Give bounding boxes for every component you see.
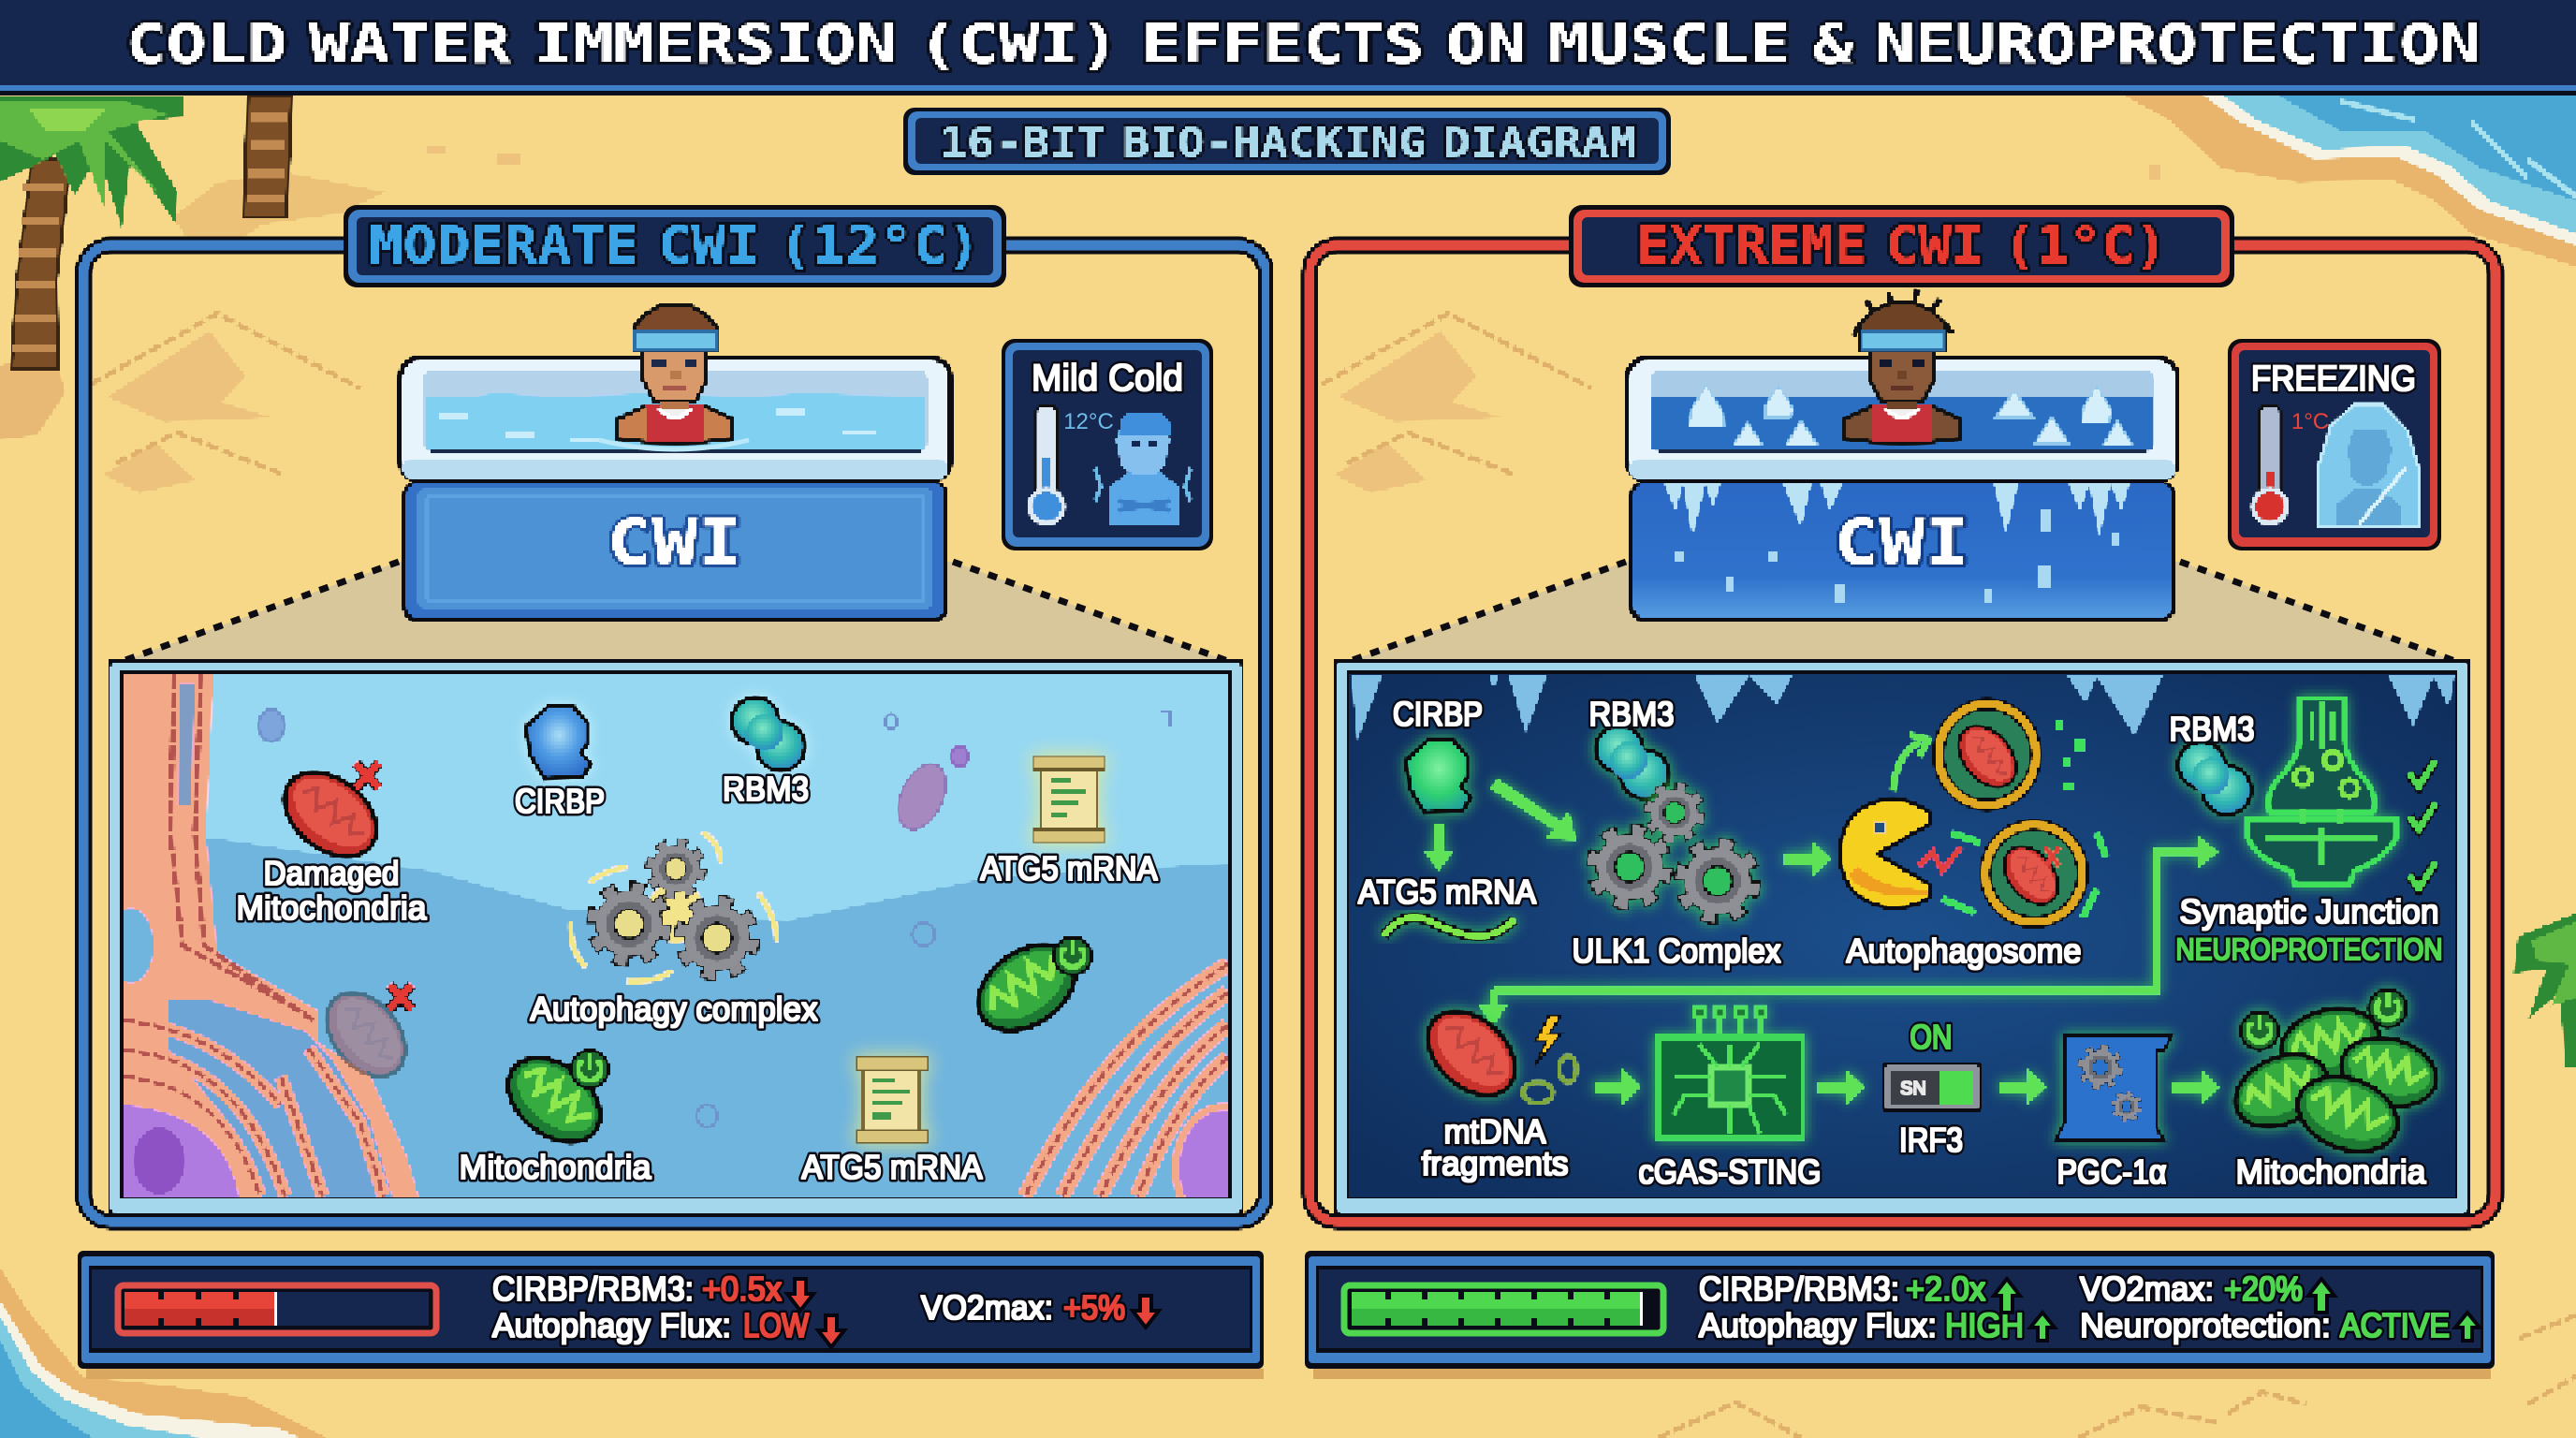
stats text extreme: +20% xyxy=(2224,1269,2303,1308)
labels: extreme inset: ATG5 mRNA xyxy=(1358,873,1536,911)
cytoplasm xyxy=(124,675,1228,1196)
panel: extreme CWI xyxy=(1310,205,2496,1222)
progress bar high xyxy=(1344,1285,1663,1333)
icon: autophagy complex gears xyxy=(571,832,777,981)
icon: capsule bottom xyxy=(1942,825,2106,922)
panel frame moderate xyxy=(83,245,1266,1222)
panel heading moderate xyxy=(344,205,1006,287)
stats text extreme xyxy=(1699,1269,2450,1344)
ice bath tub moderate xyxy=(398,306,953,622)
labels: extreme inset: Mitochondria xyxy=(2235,1152,2426,1191)
stats text moderate xyxy=(492,1269,1125,1344)
frozen person icon xyxy=(2318,404,2419,526)
palm tree right xyxy=(2513,913,2576,1067)
panel frame extreme xyxy=(1310,245,2496,1222)
title: COLD WATER IMMERSION (CWI) EFFECTS ON MUSCLE & NEUROPROTECTION xyxy=(125,12,2481,76)
stats text extreme: ACTIVE xyxy=(2340,1306,2450,1344)
labels: moderate inset: ATG5 mRNA xyxy=(981,849,1157,888)
arrow: ULK1 to autophagosome xyxy=(1784,841,1831,876)
labels: extreme inset: Autophagosome xyxy=(1846,932,2082,970)
arrow: mtDNA to cGAS xyxy=(1594,1069,1641,1105)
zoom funnel moderate xyxy=(115,562,1236,664)
temperature label: 1°C xyxy=(2291,409,2329,434)
icon: PGC-1a document xyxy=(2056,1035,2172,1140)
icon: RBM3 synapse xyxy=(2178,741,2251,814)
status box: mild cold xyxy=(1002,339,1213,550)
labels: extreme inset: IRF3 xyxy=(1899,1121,1963,1159)
thermometer icon xyxy=(1030,405,1063,523)
progress bar low xyxy=(118,1285,436,1333)
stats text moderate: LOW xyxy=(743,1306,809,1344)
labels: extreme inset: Synaptic Junction xyxy=(2179,892,2439,931)
arrow: IRF3 to PGC-1a xyxy=(1999,1069,2046,1105)
inset: cell view at 1C xyxy=(1335,658,2469,1218)
icon: CIRBP xyxy=(526,706,592,779)
labels: extreme inset: RBM3 xyxy=(1589,695,1674,733)
stats text extreme: +2.0x xyxy=(1906,1269,1985,1308)
temperature label: 12°C xyxy=(1063,409,1114,434)
labels: extreme inset xyxy=(1358,695,2443,1191)
small vesicles xyxy=(258,710,1170,1127)
labels: extreme inset: NEUROPROTECTION xyxy=(2175,932,2443,966)
icon: arrow up xyxy=(2455,1313,2480,1341)
icons: check marks xyxy=(2409,760,2436,888)
labels: extreme inset: cGAS-STING xyxy=(1638,1152,1822,1191)
labels: extreme inset: ON xyxy=(1910,1018,1953,1056)
icicles xyxy=(1352,676,2454,740)
labels: moderate inset: Mitochondria xyxy=(236,888,427,927)
labels: moderate inset: Autophagy complex xyxy=(530,990,818,1028)
icon: mitochondria cluster xyxy=(2224,990,2444,1165)
icon: mtDNA fragments xyxy=(1412,995,1576,1111)
icon: ATG5 mRNA scroll bottom xyxy=(856,1057,928,1143)
icon: RBM3 glowing xyxy=(1596,726,1669,799)
icon: ATG5 mRNA scroll top xyxy=(1033,756,1105,843)
arrow: cGAS to IRF3 xyxy=(1818,1069,1865,1105)
stats text moderate: CIRBP/RBM3: xyxy=(492,1269,694,1308)
palm shadows xyxy=(0,356,66,440)
stats text moderate: VO2max: xyxy=(921,1288,1053,1327)
icon: CIRBP glowing xyxy=(1406,740,1471,813)
arrow: to ULK1 xyxy=(1490,779,1576,841)
icon: cGAS-STING chip xyxy=(1658,1007,1803,1137)
zoom funnel extreme xyxy=(1342,562,2463,664)
icon: pac-man autophagosome xyxy=(1840,799,1961,908)
icon: arrow down xyxy=(1133,1296,1159,1328)
arrow: CIRBP to ATG5 xyxy=(1425,824,1453,871)
icon: capsule top xyxy=(1893,704,2085,805)
icon: healthy mitochondrion right xyxy=(962,927,1091,1049)
thermometer icon xyxy=(2253,405,2287,523)
subtitle text: 16-BIT BIO-HACKING DIAGRAM xyxy=(940,120,1636,167)
labels: extreme inset: ULK1 Complex xyxy=(1573,932,1780,970)
labels: moderate inset: Damaged xyxy=(264,854,399,892)
ice bath tub extreme xyxy=(1625,290,2180,622)
status box text: FREEZING xyxy=(2251,360,2416,399)
tub label extreme: CWI xyxy=(1835,506,1969,580)
palm tree left xyxy=(0,95,184,370)
person extreme xyxy=(1845,290,1959,443)
labels: extreme inset: CIRBP xyxy=(1393,695,1483,733)
arrow: PGC-1a to mitochondria xyxy=(2173,1069,2219,1105)
icon: synaptic junction xyxy=(2247,698,2396,885)
stats bar: extreme xyxy=(1305,1251,2495,1379)
panel: moderate CWI xyxy=(83,205,1273,1230)
header bar xyxy=(0,0,2576,95)
cell membrane left xyxy=(109,675,418,1196)
icon: arrow up xyxy=(1994,1279,2020,1313)
stats text extreme: Autophagy Flux: xyxy=(1699,1306,1937,1344)
icon: damaged mitochondria xyxy=(269,756,392,873)
arrow: long connector xyxy=(1479,836,2218,1026)
icon: arrow down xyxy=(818,1315,844,1347)
status box text: Mild Cold xyxy=(1032,358,1183,399)
stats text extreme: HIGH xyxy=(1945,1306,2024,1344)
cell membrane right xyxy=(1018,959,1228,1197)
labels: extreme inset: SN xyxy=(1900,1078,1926,1099)
labels: extreme inset: mtDNA xyxy=(1443,1112,1546,1151)
panel heading extreme xyxy=(1569,205,2234,287)
icon: arrow up xyxy=(2030,1313,2055,1341)
icon: arrow down xyxy=(787,1279,813,1311)
shivering person icon xyxy=(1095,412,1191,524)
inset: cell view at 12C xyxy=(109,658,1273,1230)
labels: extreme inset: RBM3 xyxy=(2170,710,2254,748)
subtitle badge xyxy=(903,108,1671,175)
faded organelle xyxy=(898,764,947,831)
stats text extreme: CIRBP/RBM3: xyxy=(1699,1269,1899,1308)
icon: RBM3 xyxy=(732,697,805,770)
stats text extreme: VO2max: xyxy=(2080,1269,2214,1308)
labels: extreme inset: PGC-1α xyxy=(2057,1152,2166,1191)
panel heading moderate: MODERATE CWI (12°C) xyxy=(369,215,981,275)
palm tree middle xyxy=(243,95,292,217)
icon: healthy mitochondrion bottom xyxy=(492,1041,616,1159)
icicles on tub xyxy=(1664,483,2130,536)
status box: freezing xyxy=(2228,339,2441,550)
top-right sea xyxy=(2120,94,2576,267)
icon: IRF3 switch xyxy=(1881,1062,1983,1112)
stats text moderate: Autophagy Flux: xyxy=(492,1306,731,1344)
tub label moderate: CWI xyxy=(607,506,743,580)
person moderate xyxy=(618,306,732,443)
labels: moderate inset: CIRBP xyxy=(515,782,605,820)
stats text moderate: +5% xyxy=(1063,1288,1125,1327)
icon: ATG5 mRNA strand xyxy=(1383,917,1515,936)
stats text extreme: Neuroprotection: xyxy=(2080,1306,2331,1344)
panel heading extreme: EXTREME CWI (1°C) xyxy=(1636,215,2168,275)
labels: moderate inset xyxy=(236,770,1157,1186)
ice chunks xyxy=(1689,386,2132,446)
icon: ULK1 gears xyxy=(1596,788,1751,915)
labels: moderate inset: Mitochondria xyxy=(459,1148,651,1186)
icon: faded damaged mitochondria xyxy=(311,977,421,1092)
bottom-left sea xyxy=(0,1267,329,1438)
stats text moderate: +0.5x xyxy=(702,1269,782,1308)
stats bar: moderate xyxy=(78,1251,1264,1379)
labels: extreme inset: fragments xyxy=(1421,1144,1569,1182)
labels: moderate inset: ATG5 mRNA xyxy=(801,1148,983,1186)
labels: moderate inset: RBM3 xyxy=(723,770,809,808)
icon: arrow up xyxy=(2308,1279,2334,1313)
